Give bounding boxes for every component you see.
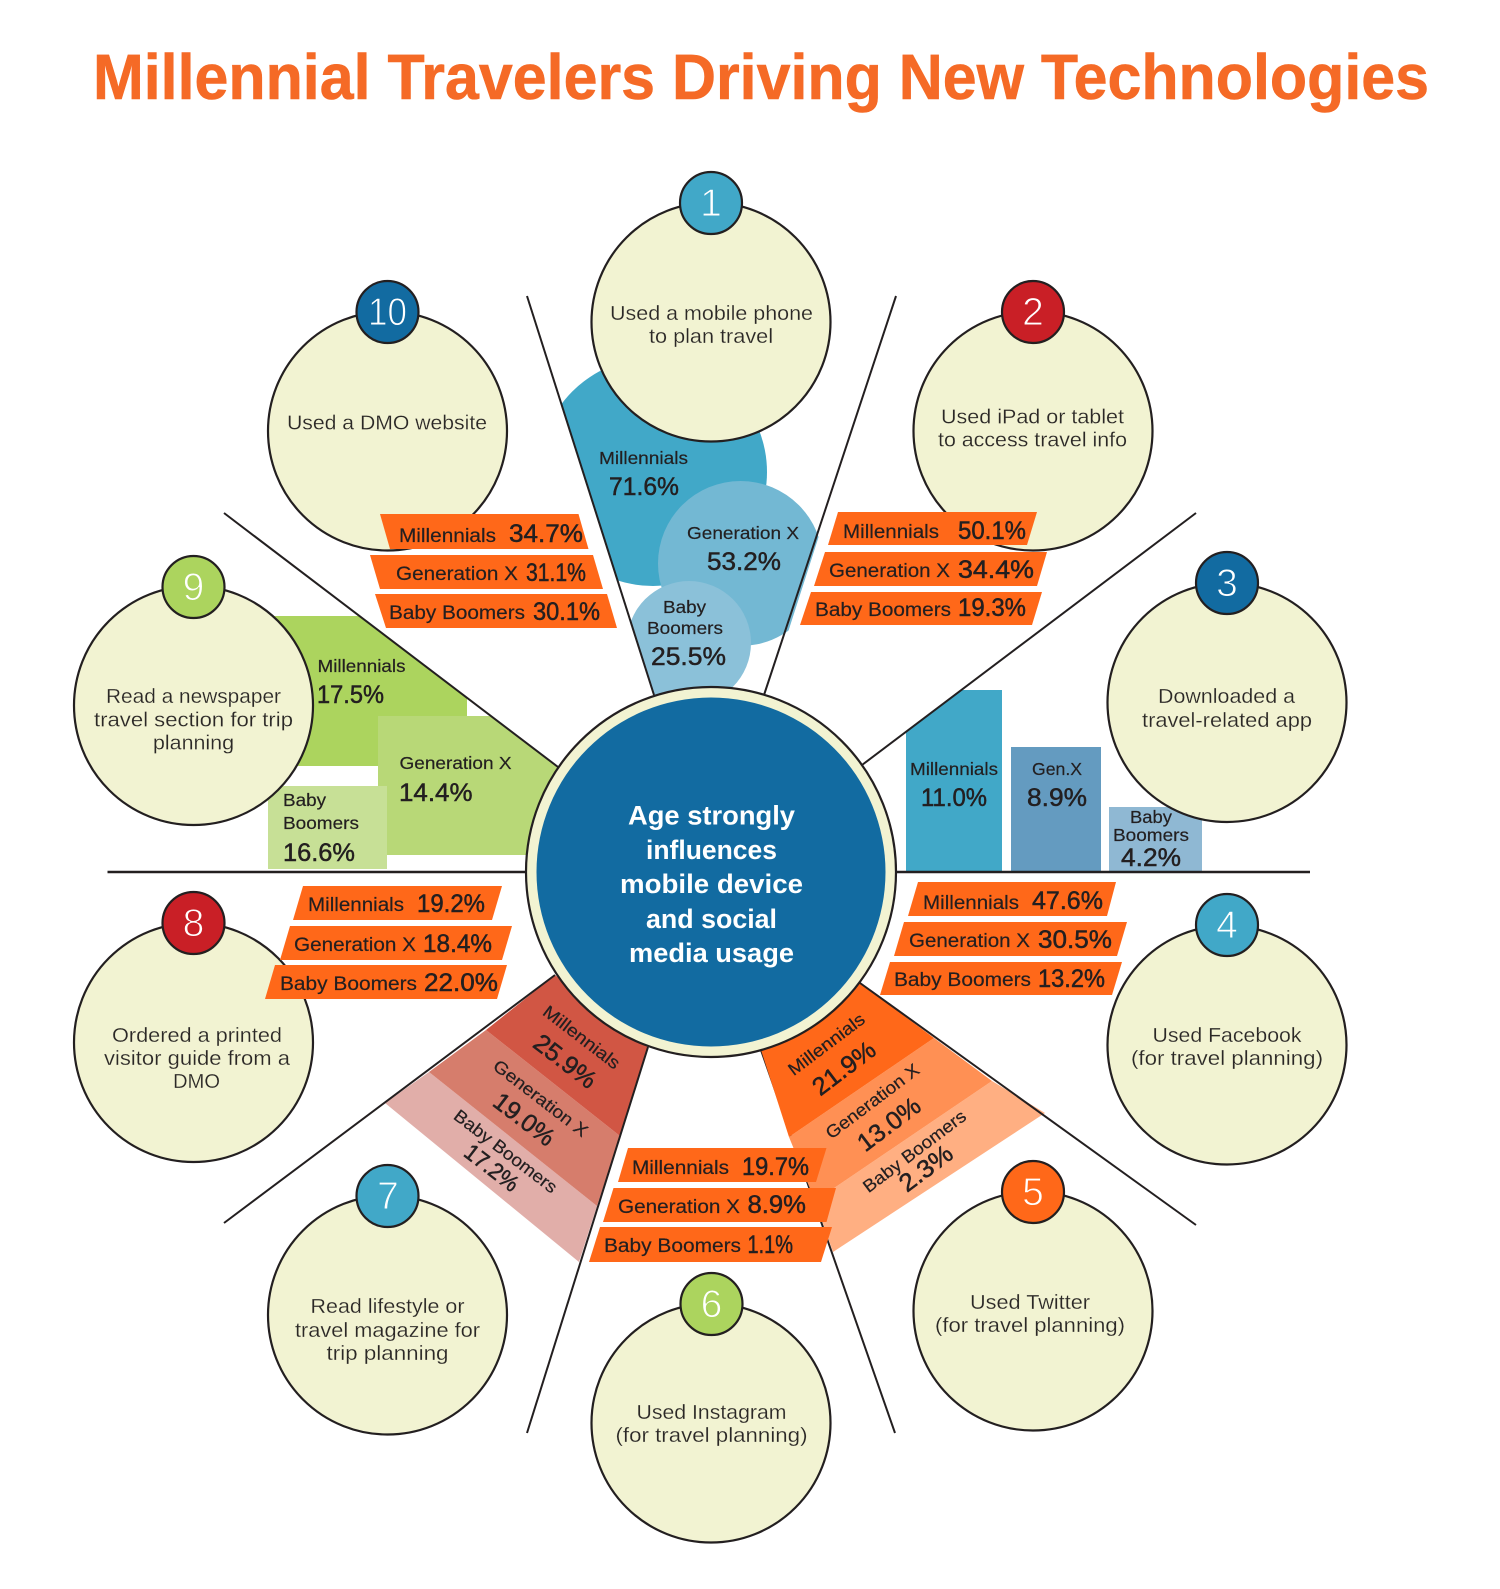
data tapes bbox=[800, 512, 1047, 625]
data labels: Baby bbox=[283, 790, 326, 810]
circle text bbox=[94, 685, 293, 754]
data labels: Millennials bbox=[318, 656, 406, 676]
center statement: Age strongly bbox=[628, 800, 795, 830]
circle text bbox=[1131, 1024, 1323, 1070]
circle text: (for travel planning) bbox=[616, 1424, 808, 1447]
data labels bbox=[599, 448, 799, 671]
circle text bbox=[616, 1401, 808, 1447]
badge number: 1 bbox=[700, 182, 722, 225]
wedge labels: Generation X bbox=[822, 1059, 923, 1143]
data tapes: 30.5% bbox=[1038, 926, 1112, 954]
data labels: 17.5% bbox=[317, 681, 384, 709]
circle text bbox=[1142, 685, 1312, 732]
data labels bbox=[910, 759, 1189, 872]
data tapes: 13.2% bbox=[1038, 965, 1105, 993]
number badge 8 bbox=[162, 892, 224, 954]
circle text: visitor guide from a bbox=[104, 1047, 291, 1070]
data tapes bbox=[370, 514, 617, 628]
circle text: (for travel planning) bbox=[935, 1314, 1125, 1337]
circle text: to access travel info bbox=[938, 428, 1127, 452]
main circle bbox=[914, 1192, 1152, 1430]
data labels: Boomers bbox=[283, 813, 359, 833]
data tapes: Generation X bbox=[396, 564, 518, 585]
circle text: Used a DMO website bbox=[287, 412, 487, 434]
panel 2: used iPad or tablet bbox=[800, 281, 1152, 625]
badge number: 8 bbox=[183, 902, 204, 945]
panel 4: used Facebook bbox=[880, 882, 1346, 1164]
circle text: trip planning bbox=[326, 1342, 448, 1365]
badge number: 5 bbox=[1022, 1171, 1044, 1214]
data tapes: Baby Boomers bbox=[815, 600, 951, 621]
data labels: Generation X bbox=[687, 523, 799, 543]
data tapes bbox=[265, 886, 512, 999]
center circle: key message bbox=[526, 687, 896, 1057]
circle text: Read lifestyle or bbox=[310, 1295, 465, 1318]
wedge labels: 17.2% bbox=[459, 1138, 524, 1197]
wedge labels: 2.3% bbox=[894, 1139, 959, 1198]
panel 3: downloaded a travel app bbox=[906, 552, 1346, 872]
circle text: Used Twitter bbox=[970, 1291, 1090, 1314]
data tapes: 31.1% bbox=[526, 559, 586, 587]
data labels: 8.9% bbox=[1027, 784, 1087, 812]
number badge 7 bbox=[356, 1165, 418, 1227]
bar chart: app downloads by generation bbox=[906, 690, 1202, 872]
data labels: 53.2% bbox=[707, 548, 781, 576]
data tapes: 19.3% bbox=[958, 594, 1026, 622]
circle text: Read a newspaper bbox=[106, 685, 281, 708]
circle text: Used iPad or tablet bbox=[941, 406, 1124, 428]
center statement: influences bbox=[646, 835, 777, 865]
main circle bbox=[268, 1196, 507, 1434]
data tapes: Millennials bbox=[399, 526, 496, 547]
badge number: 9 bbox=[183, 566, 204, 609]
main circle bbox=[1108, 926, 1346, 1164]
circle text bbox=[104, 1024, 291, 1093]
data tapes bbox=[589, 1148, 836, 1262]
data tapes: 47.6% bbox=[1032, 887, 1103, 915]
data tapes: 50.1% bbox=[958, 517, 1026, 545]
circle text bbox=[935, 1291, 1125, 1337]
panel 7: read lifestyle or travel magazine bbox=[268, 975, 648, 1434]
data labels: 16.6% bbox=[283, 839, 355, 867]
circle text: Ordered a printed bbox=[112, 1024, 282, 1047]
number badge 2 bbox=[1002, 281, 1064, 343]
circle text: planning bbox=[153, 732, 234, 754]
data tapes: Generation X bbox=[909, 931, 1030, 952]
badge number: 4 bbox=[1216, 904, 1238, 947]
wedge labels bbox=[784, 1009, 970, 1198]
circle text: (for travel planning) bbox=[1131, 1047, 1323, 1070]
badge number: 3 bbox=[1216, 562, 1238, 605]
data labels: 25.5% bbox=[651, 643, 726, 671]
data labels: Baby bbox=[1130, 807, 1172, 827]
badge number: 7 bbox=[377, 1175, 399, 1218]
data tapes: 34.7% bbox=[509, 520, 583, 548]
number badge 5 bbox=[1002, 1161, 1064, 1223]
data tapes: Generation X bbox=[618, 1197, 740, 1218]
circle text: Used Instagram bbox=[636, 1401, 786, 1424]
data tapes: Baby Boomers bbox=[389, 603, 525, 624]
panel 9: read a newspaper travel section bbox=[74, 556, 600, 869]
panel 1: used a mobile phone bbox=[539, 172, 830, 705]
badge number: 6 bbox=[701, 1283, 722, 1326]
data tapes: 1.1% bbox=[748, 1231, 793, 1259]
circle text: Used a mobile phone bbox=[610, 302, 813, 325]
badge number: 10 bbox=[368, 291, 407, 334]
circle text: Downloaded a bbox=[1158, 685, 1296, 708]
center statement: mobile device bbox=[620, 869, 803, 899]
circle text: DMO bbox=[173, 1070, 220, 1093]
data labels: Boomers bbox=[647, 618, 723, 638]
data labels: 71.6% bbox=[609, 473, 679, 501]
data tapes: Millennials bbox=[632, 1158, 729, 1179]
data labels: Gen.X bbox=[1032, 759, 1082, 779]
main circle bbox=[268, 312, 507, 550]
main circle bbox=[592, 202, 830, 442]
data tapes: 30.1% bbox=[533, 598, 600, 626]
badge number: 2 bbox=[1022, 291, 1044, 334]
wedge labels: 19.0% bbox=[488, 1087, 560, 1152]
data labels bbox=[283, 656, 512, 867]
circle text bbox=[938, 406, 1127, 452]
circle text: to plan travel bbox=[649, 325, 773, 348]
center statement: media usage bbox=[629, 938, 794, 968]
panel 8: ordered a printed visitor guide bbox=[74, 886, 512, 1162]
main circle bbox=[74, 586, 313, 825]
data tapes: Baby Boomers bbox=[280, 974, 417, 995]
circle text: travel magazine for bbox=[295, 1319, 480, 1342]
data tapes: 22.0% bbox=[424, 969, 498, 997]
main circle bbox=[592, 1304, 830, 1542]
segmented wedge chart bbox=[761, 983, 1045, 1252]
data labels: Millennials bbox=[910, 759, 998, 779]
inner disc bbox=[536, 698, 886, 1046]
number badge 1 bbox=[680, 172, 742, 234]
number badge 10 bbox=[356, 281, 418, 343]
data tapes: Generation X bbox=[294, 935, 416, 956]
wedge labels: Millennials bbox=[539, 1001, 624, 1073]
data tapes: Generation X bbox=[829, 561, 950, 582]
data tapes: Millennials bbox=[308, 895, 404, 916]
data tapes: 19.2% bbox=[417, 890, 485, 918]
number badge 9 bbox=[162, 556, 224, 618]
title: Millennial Travelers Driving New Technologies bbox=[93, 41, 1429, 113]
data tapes: 18.4% bbox=[423, 930, 492, 958]
main circle bbox=[74, 923, 313, 1162]
wedge labels bbox=[450, 1001, 624, 1197]
wedge labels: Baby Boomers bbox=[450, 1105, 562, 1197]
data labels: Boomers bbox=[1113, 825, 1189, 845]
center statement bbox=[620, 800, 803, 968]
wedge labels: 21.9% bbox=[807, 1036, 881, 1101]
data tapes: 8.9% bbox=[748, 1191, 806, 1219]
center statement: and social bbox=[646, 904, 777, 934]
number badge 3 bbox=[1196, 552, 1258, 614]
circle text: travel section for trip bbox=[94, 708, 293, 732]
data tapes: Baby Boomers bbox=[894, 970, 1031, 991]
data labels: Baby bbox=[663, 597, 706, 617]
number badge 4 bbox=[1196, 894, 1258, 956]
wedge labels: Millennials bbox=[784, 1009, 869, 1080]
data tapes: Millennials bbox=[843, 522, 939, 543]
wedge labels: Generation X bbox=[489, 1056, 592, 1141]
data tapes: 19.7% bbox=[742, 1153, 809, 1181]
data labels: Millennials bbox=[599, 448, 688, 468]
data tapes: 34.4% bbox=[958, 556, 1034, 584]
number badge 6 bbox=[680, 1273, 742, 1335]
data labels: 4.2% bbox=[1121, 844, 1181, 872]
wedge labels: 25.9% bbox=[528, 1029, 602, 1095]
data labels: 14.4% bbox=[399, 779, 472, 807]
circle text bbox=[295, 1295, 480, 1365]
data tapes bbox=[880, 882, 1127, 995]
panel 6: used Instagram bbox=[589, 1148, 836, 1542]
data labels: Generation X bbox=[400, 753, 512, 773]
main circle bbox=[914, 312, 1152, 550]
outer ring bbox=[526, 687, 896, 1057]
data tapes: Millennials bbox=[923, 893, 1019, 914]
panel 10: used a DMO website bbox=[268, 281, 617, 628]
bubble chart: mobile phone use by generation bbox=[562, 370, 818, 694]
stepped block chart bbox=[268, 616, 557, 869]
wedge labels: 13.0% bbox=[852, 1092, 926, 1157]
segmented wedge chart bbox=[385, 975, 648, 1262]
data labels: 11.0% bbox=[921, 784, 987, 812]
main circle bbox=[1108, 583, 1346, 822]
circle text: Used Facebook bbox=[1152, 1024, 1302, 1047]
circle text: travel-related app bbox=[1142, 709, 1312, 732]
data tapes: Baby Boomers bbox=[604, 1236, 741, 1257]
wedge labels: Baby Boomers bbox=[859, 1106, 970, 1197]
panel 5: used Twitter bbox=[761, 983, 1152, 1430]
circle text bbox=[610, 302, 813, 348]
